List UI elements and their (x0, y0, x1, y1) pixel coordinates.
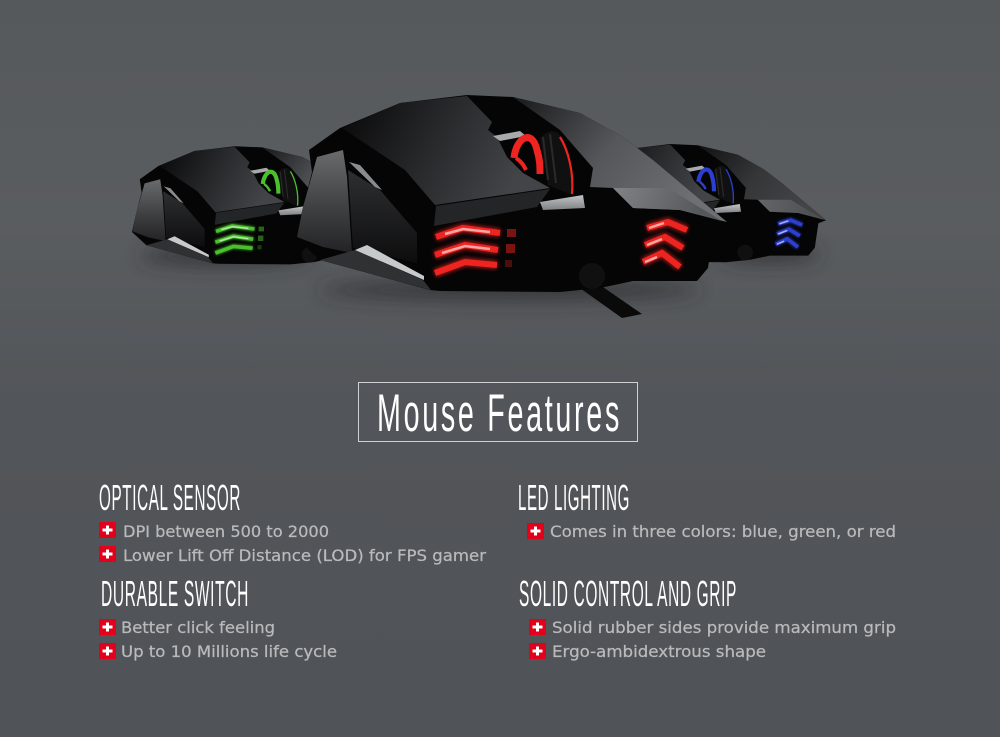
section: solid control and grip (519, 573, 896, 661)
mouse shadow (140, 245, 820, 300)
mouse: red (centre) (296, 95, 727, 292)
bullet icon (99, 522, 116, 538)
section: LED lighting (518, 477, 896, 541)
section: optical sensor (99, 477, 486, 565)
bullet text: Better click feeling (121, 618, 275, 637)
bullet icon (529, 619, 546, 635)
bullet icon (99, 619, 116, 635)
bullet text: Solid rubber sides provide maximum grip (552, 618, 896, 637)
bullet icon (99, 643, 116, 659)
title: Mouse Features (377, 384, 622, 443)
bullet text: Comes in three colors: blue, green, or red (550, 522, 896, 541)
bullet icon (99, 546, 116, 562)
section: durable switch: DURABLE SWITCH (101, 573, 249, 614)
mouse: blue (right) (568, 144, 826, 262)
bullet text: DPI between 500 to 2000 (123, 522, 329, 541)
bullet icon (527, 523, 544, 539)
bullet icon (529, 643, 546, 659)
title box (358, 382, 638, 443)
bullet text: Ergo-ambidextrous shape (552, 642, 766, 661)
bullet text: Lower Lift Off Distance (LOD) for FPS gamer (123, 546, 486, 565)
section: LED lighting: LED LIGHTING (518, 477, 630, 518)
product image: three gaming mice (132, 95, 826, 318)
section: durable switch (99, 573, 337, 661)
section: optical sensor: OPTICAL SENSOR (99, 477, 241, 518)
mouse: green (left) (132, 146, 391, 264)
mouse cable (577, 285, 642, 318)
bullet text: Up to 10 Millions life cycle (121, 642, 337, 661)
